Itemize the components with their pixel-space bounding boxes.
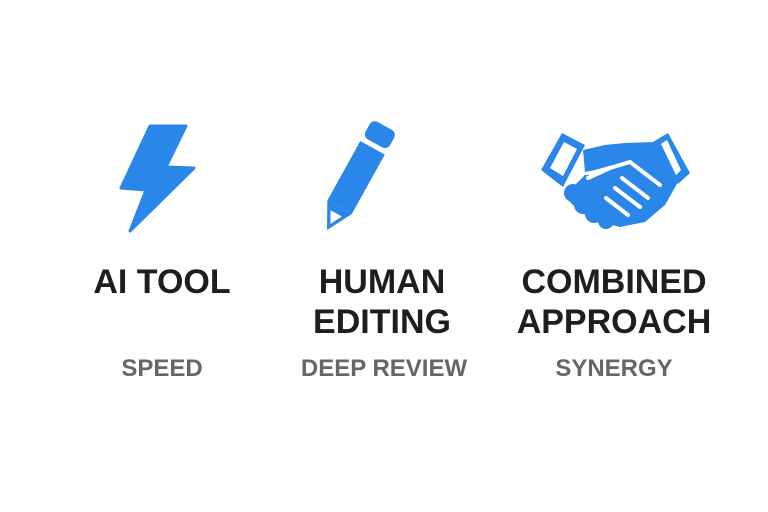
heading: HUMAN EDITING: HUMAN — [319, 263, 445, 301]
heading: HUMAN EDITING — [313, 263, 451, 341]
icon: handshake — [541, 133, 690, 229]
icon: lightning bolt — [121, 126, 194, 231]
heading: AI TOOL: AI TOOL — [93, 263, 231, 301]
heading: COMBINED APPROACH — [517, 263, 711, 341]
heading: HUMAN EDITING: EDITING — [313, 303, 451, 341]
subtitle: SPEED: SPEED — [121, 355, 203, 382]
subtitle: SYNERGY: SYNERGY — [555, 355, 673, 382]
heading: COMBINED APPROACH: COMBINED — [521, 263, 707, 301]
heading: COMBINED APPROACH: APPROACH — [517, 303, 711, 341]
icon: pencil — [315, 119, 397, 237]
subtitle: DEEP REVIEW: DEEP REVIEW — [301, 355, 467, 382]
